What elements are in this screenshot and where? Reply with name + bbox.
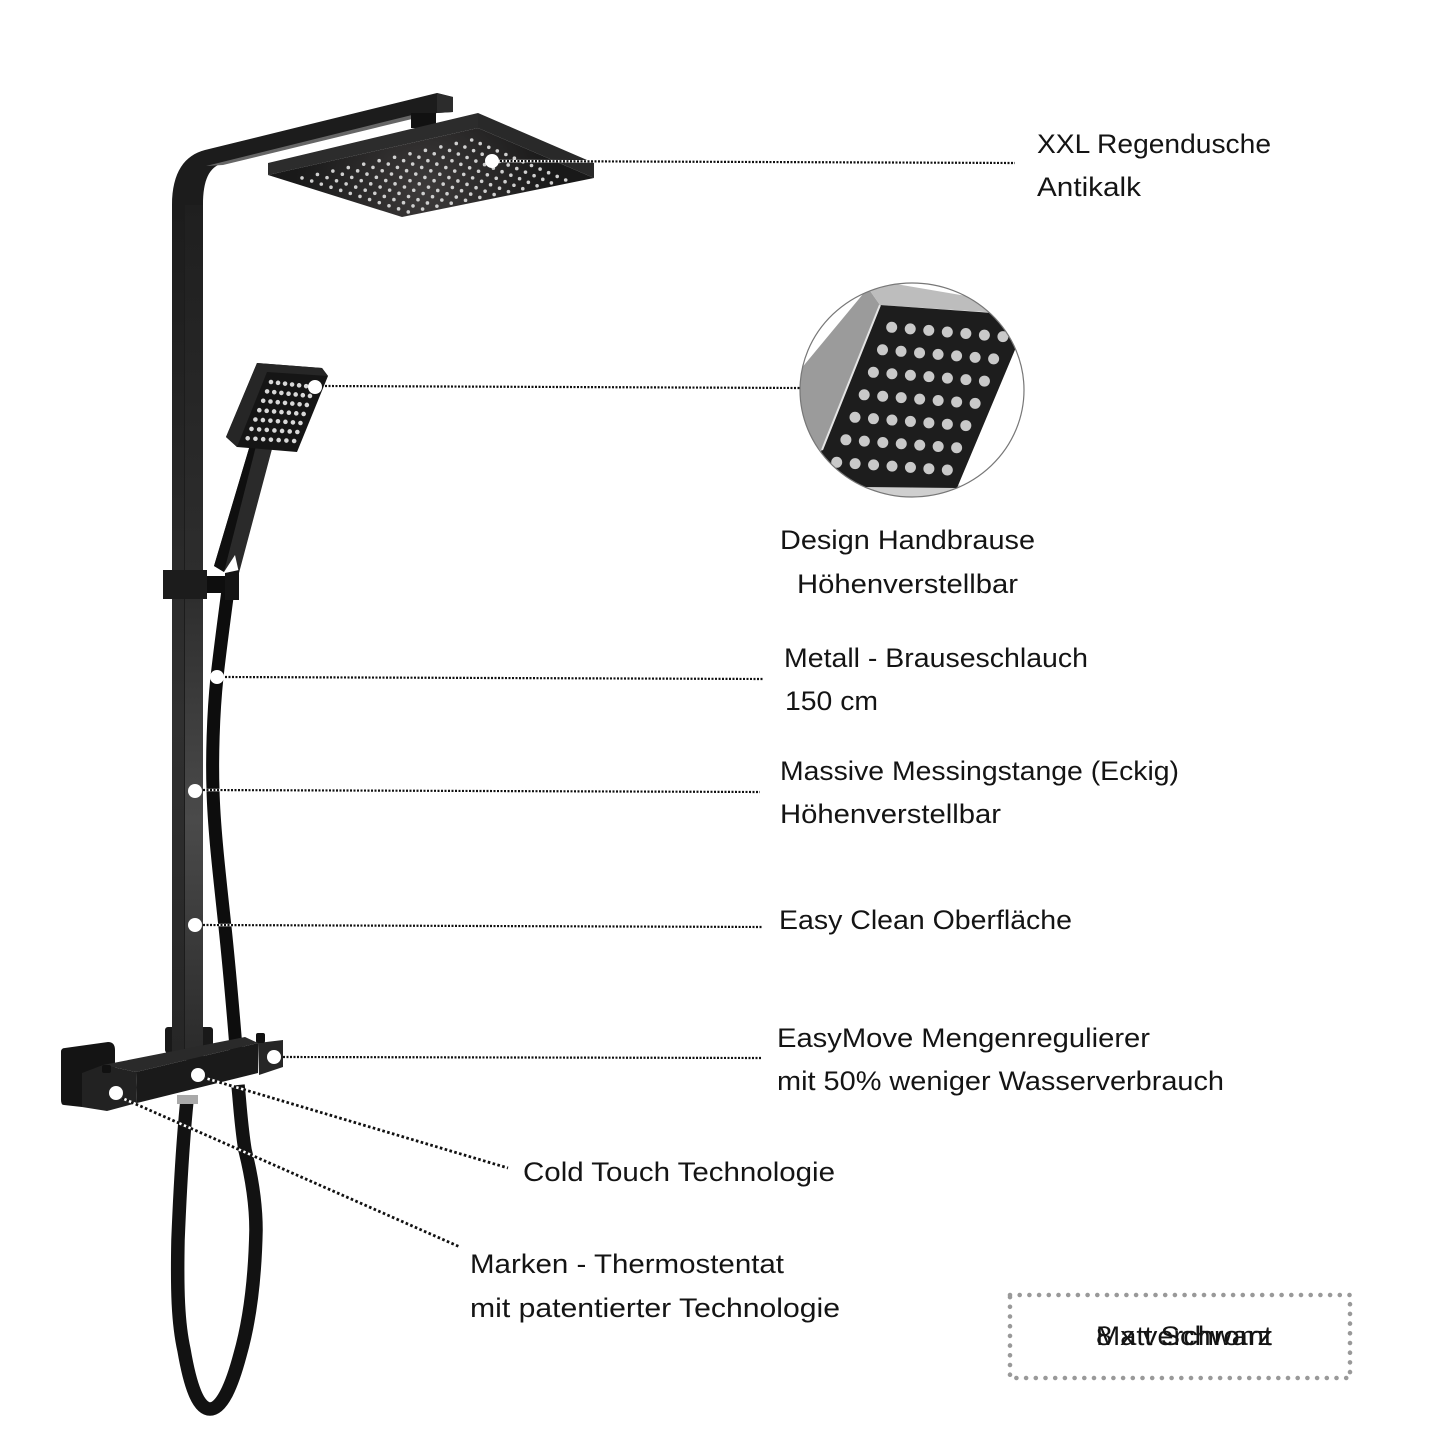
leader: rod [203,790,760,792]
handle dark edge [214,445,256,572]
front bevel [268,113,478,175]
label: rain shower [1037,129,1271,202]
left control box [82,1065,137,1111]
magnifier: hand shower detail [800,283,1024,500]
leader: flow regulator [283,1057,762,1058]
marker: flow regulator [267,1050,281,1064]
label: flow regulator: mit 50% weniger Wasserverbrauch [777,1066,1224,1096]
marker: hose [210,670,224,684]
overlapping badge text: 8 x verchromt [1096,1321,1273,1351]
leader: surface [203,925,763,927]
hose lower loop [178,1085,256,1409]
marker: cold touch [191,1068,205,1082]
label: thermostat: Marken - Thermostentat [470,1249,785,1279]
rod lit side [185,205,203,1060]
overlapping badge text: Matt Schwarz [1096,1321,1272,1351]
thermostat top face [103,1037,258,1072]
leader: thermostat [122,1098,460,1247]
label: hose [784,643,1088,716]
marker: rain shower [485,154,499,168]
leader: hand shower [325,386,800,388]
rod outline [172,93,453,1060]
magnified content [800,283,1017,500]
dotted frame [1010,1295,1350,1378]
overhead rain shower head [268,113,594,217]
label: hand shower: Höhenverstellbar [797,569,1018,599]
marker: surface [188,918,202,932]
height-adjustable slider with holder [163,570,239,600]
label: rod: Höhenverstellbar [780,799,1001,829]
shower column product illustration [61,93,594,1409]
leader lines and marker dots [109,154,1015,1247]
leader: rain shower [500,161,1015,163]
label: thermostat [470,1249,840,1323]
nozzle grid [302,140,566,212]
marker: hand shower [308,380,322,394]
riser rod and overhead arm [172,93,453,1060]
arm highlight strip [206,115,412,166]
left wall bracket [61,1042,115,1107]
arm end cap [437,93,453,113]
label: cold touch: Cold Touch Technologie [523,1157,835,1187]
left frame [800,288,880,452]
label: rod [780,756,1179,829]
label: hose: Metall - Brauseschlauch [784,643,1088,673]
label: rain shower: Antikalk [1037,172,1142,202]
label: hand shower: Design Handbrause [780,525,1035,555]
holder [225,570,239,600]
label: flow regulator: EasyMove Mengenregulierer [777,1023,1150,1053]
label: surface: Easy Clean Oberfläche [779,905,1072,935]
right knob [256,1033,265,1043]
connector [207,576,225,593]
lens outline [800,283,1024,497]
top frame [870,284,988,312]
slider block [163,570,207,599]
hose upper section [213,590,237,1060]
chrome fitting [177,1095,198,1104]
leader: hose [225,677,763,679]
underside face [268,128,594,217]
head side [226,363,328,447]
nozzles [248,382,313,441]
leader: cold touch [205,1078,508,1168]
rear wall bracket [165,1027,213,1053]
rod dark side [172,205,184,1060]
label: rain shower: XXL Regendusche [1037,129,1271,159]
finish badge [1010,1295,1350,1378]
thermostat body [136,1043,258,1103]
left knob [102,1065,111,1073]
head body [226,363,328,452]
right control box [258,1040,283,1075]
marker: rod [188,784,202,798]
bottom frame [866,485,960,496]
handle [214,445,272,573]
label: flow regulator [777,1023,1224,1096]
right bevel [478,113,594,178]
hand shower [214,363,328,573]
label: thermostat: mit patentierter Technologie [470,1293,840,1323]
label: hand shower [780,525,1035,599]
marker: thermostat [109,1086,123,1100]
black face [810,305,1017,488]
shower neck [411,113,436,128]
label: rod: Massive Messingstange (Eckig) [780,756,1179,786]
thermostat [61,1033,283,1111]
leader underlay for dark areas [122,161,1015,1247]
label: hose: 150 cm [785,686,878,716]
lens nozzles [837,327,1003,470]
edge highlight [822,305,880,450]
